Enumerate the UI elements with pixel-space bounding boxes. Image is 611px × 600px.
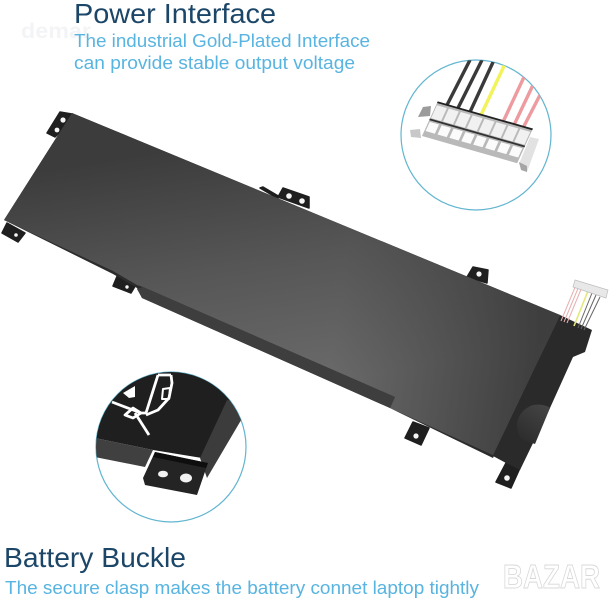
cable wires — [561, 285, 600, 330]
battery end cap — [493, 315, 592, 470]
battery underside lip — [4, 113, 560, 458]
mounting tabs — [2, 112, 520, 488]
text: battery buckle description: The secure clasp makes the battery connet laptop tightly — [5, 578, 479, 598]
white recycling icon — [112, 375, 172, 435]
right side wall — [200, 400, 241, 478]
connector body — [422, 101, 533, 163]
text: power interface description: can provide stable output voltage — [74, 53, 355, 73]
battery side strip — [137, 287, 395, 408]
text: power interface description: The industrial Gold-Plated Interface — [74, 31, 370, 51]
buckle tab — [143, 452, 208, 495]
battery illustration — [2, 112, 608, 488]
wires — [447, 60, 540, 128]
left side wall — [96, 438, 153, 467]
text: power interface description — [74, 31, 370, 73]
battery end cap bulge — [517, 405, 550, 444]
tab holes — [14, 117, 510, 481]
callout: connector magnified — [401, 60, 551, 210]
battery face — [4, 113, 560, 455]
side ears — [418, 106, 431, 117]
callout: battery buckle magnified — [95, 371, 247, 523]
black battery body — [96, 372, 232, 458]
cable connector — [573, 280, 608, 298]
watermark: demar: demar — [21, 20, 91, 43]
title: Battery Buckle: Battery Buckle — [4, 542, 186, 573]
